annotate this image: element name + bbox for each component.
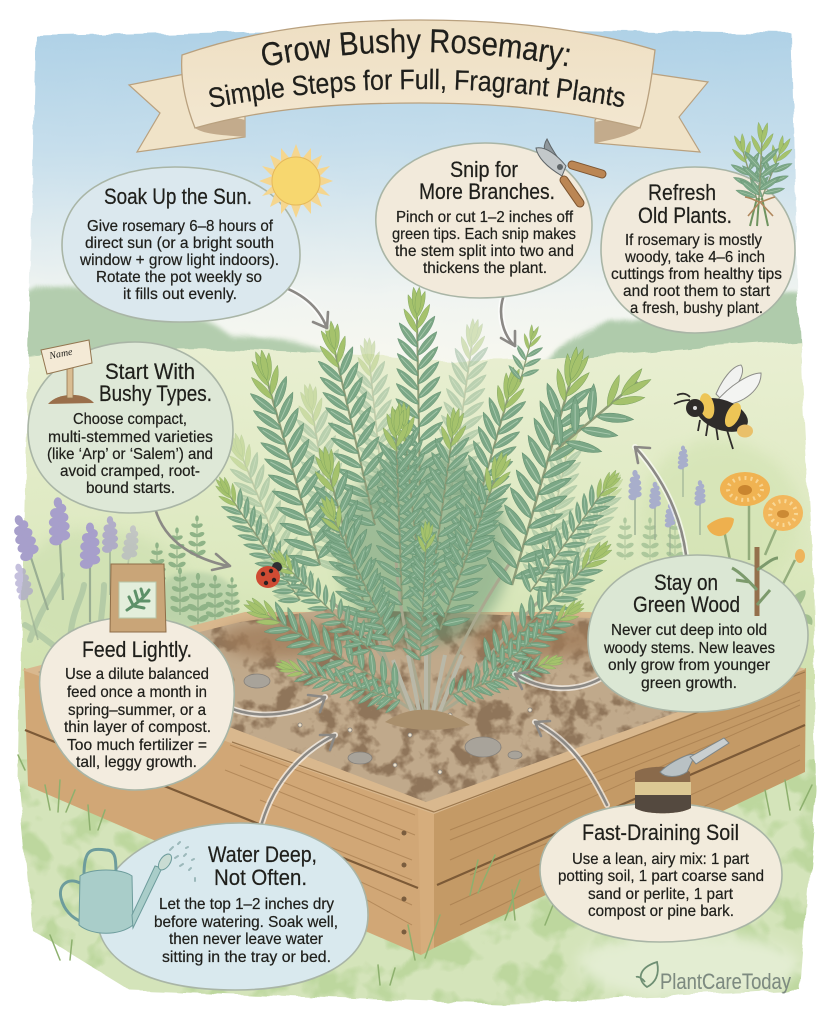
text block: sand or perlite, 1 part <box>588 886 734 903</box>
text block: woody stems. New leaves <box>603 640 775 657</box>
pebbles in soil <box>244 674 532 774</box>
heading: Green Wood <box>633 592 740 617</box>
panel: snip for more branches <box>376 143 592 298</box>
text block: woody, take 4–6 inch <box>624 249 765 266</box>
logo: PlantCareToday: PlantCareToday <box>660 969 791 994</box>
text block: and root them to start <box>623 283 771 300</box>
title banner <box>128 19 709 153</box>
text block: the stem split into two and <box>395 243 574 260</box>
text block: it fills out evenly. <box>123 286 237 303</box>
text block: If rosemary is mostly <box>625 232 762 249</box>
lower side branches <box>232 581 415 715</box>
arrows <box>155 284 686 830</box>
text block: window + grow light indoors). <box>79 252 279 269</box>
heading <box>419 157 555 204</box>
text block: feed once a month in <box>67 684 207 701</box>
woody stems <box>330 560 540 715</box>
panel: fast-draining soil <box>540 803 782 942</box>
herb bush left <box>147 515 241 628</box>
icon: watering can <box>60 842 195 933</box>
icon: woody twig <box>732 547 778 616</box>
text block: compost or pine bark. <box>588 903 734 920</box>
text block: direct sun (or a bright south <box>85 235 274 252</box>
text block <box>611 232 782 317</box>
soil mound at plant base <box>385 710 470 730</box>
icon: rosemary bundle <box>720 121 804 226</box>
logo: PlantCareToday <box>636 962 791 994</box>
text block <box>64 666 211 771</box>
text block: thin layer of compost. <box>64 719 211 736</box>
icon: fertilizer bag <box>110 564 166 632</box>
text block: thickens the plant. <box>423 260 547 277</box>
text block: (like ‘Arp’ or ‘Salem’) and <box>47 446 213 463</box>
text block: then never leave water <box>169 931 324 948</box>
panel: start with bushy types <box>28 342 233 513</box>
text block: avoid cramped, root- <box>60 463 200 480</box>
heading <box>208 842 317 890</box>
icon: soil layers and scoop <box>635 738 729 813</box>
icon: pruners <box>536 139 602 203</box>
text block: Too much fertilizer = <box>67 737 207 754</box>
heading: Old Plants. <box>638 203 732 228</box>
text block: Use a lean, airy mix: 1 part <box>572 851 750 868</box>
text block: sitting in the tray or bed. <box>162 949 331 966</box>
heading: Refresh <box>648 180 716 205</box>
text block: tall, leggy growth. <box>76 754 197 771</box>
panel: water deep, not often <box>97 823 368 990</box>
text block: Give rosemary 6–8 hours of <box>87 218 274 235</box>
title line one <box>263 52 571 67</box>
heading: Fast-Draining Soil <box>582 820 739 845</box>
banner body <box>182 20 655 128</box>
text block: spring–summer, or a <box>68 702 206 719</box>
panel: soak up the sun <box>62 167 300 322</box>
heading: Not Often. <box>214 865 307 890</box>
text block: before watering. Soak well, <box>154 914 338 931</box>
icon: sun <box>259 144 333 218</box>
text block: Never cut deep into old <box>611 622 767 639</box>
rosemary plant <box>201 286 668 718</box>
text block: Let the top 1–2 inches dry <box>159 896 334 913</box>
heading <box>633 570 740 617</box>
panel: feed lightly <box>40 617 234 790</box>
text block <box>79 218 279 303</box>
panel: refresh old plants <box>601 167 795 333</box>
heading: Stay on <box>654 570 718 595</box>
heading <box>638 180 732 228</box>
icon: name sign: Name <box>47 347 74 362</box>
heading: Snip for <box>450 157 518 182</box>
heading: Feed Lightly. <box>82 637 192 662</box>
text block: Pinch or cut 1–2 inches off <box>396 209 574 226</box>
text block: Rotate the pot weekly so <box>96 269 262 286</box>
ladybug <box>256 562 282 588</box>
text block: green growth. <box>641 675 737 692</box>
orange flowers <box>707 472 813 625</box>
lavender patch left <box>8 497 141 650</box>
heading: Soak Up the Sun. <box>104 184 252 209</box>
text block <box>392 209 576 277</box>
faded back branches <box>210 315 636 612</box>
text block: green tips. Each snip makes <box>392 226 576 243</box>
raised wooden garden bed <box>22 609 806 955</box>
bumble bee <box>674 365 761 449</box>
heading <box>99 359 212 406</box>
text block <box>47 411 213 497</box>
heading: Bushy Types. <box>99 381 212 406</box>
text block <box>154 896 338 966</box>
title banner: Simple Steps for Full, Fragrant Plants <box>209 68 625 108</box>
icon: name sign <box>41 340 94 404</box>
title banner: Grow Bushy Rosemary: <box>262 28 570 70</box>
back branches <box>229 342 350 577</box>
text block: bound starts. <box>86 480 175 497</box>
front branches <box>368 405 429 609</box>
text block: cuttings from healthy tips <box>611 266 782 283</box>
text block: Choose compact, <box>73 411 187 428</box>
panel: stay on green wood <box>588 555 808 712</box>
title line two <box>210 89 626 108</box>
heading: Start With <box>105 359 195 384</box>
text block: multi-stemmed varieties <box>48 429 213 446</box>
text block: Use a dilute balanced <box>65 666 209 683</box>
heading: More Branches. <box>419 179 555 204</box>
heading: Water Deep, <box>208 842 317 867</box>
text block <box>603 622 775 692</box>
text block: potting soil, 1 part coarse sand <box>558 868 764 885</box>
text block: only grow from younger <box>608 657 771 674</box>
banner tails <box>129 72 708 152</box>
text block: a fresh, bushy plant. <box>630 300 763 317</box>
meadow plants right: lavender <box>615 446 706 560</box>
text block <box>558 851 764 920</box>
grass tufts <box>18 755 812 985</box>
